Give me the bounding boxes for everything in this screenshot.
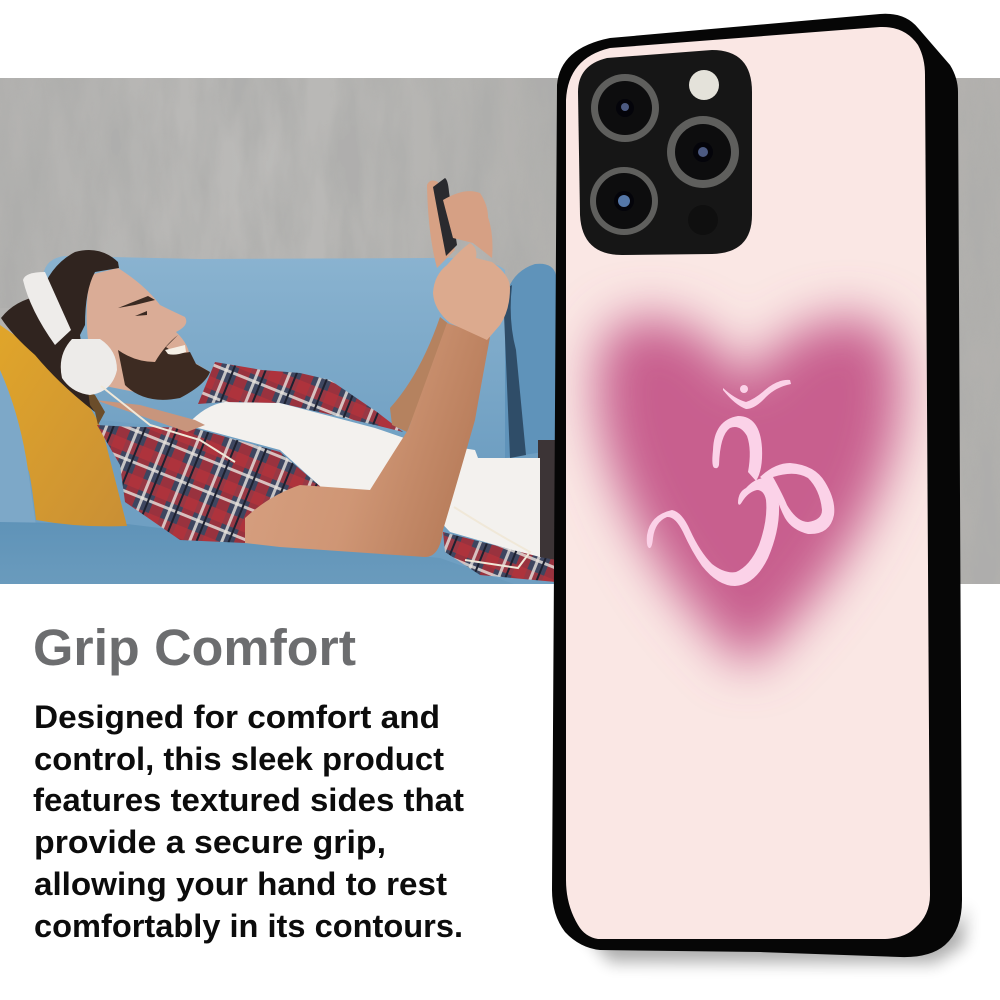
yellow pillow <box>0 325 127 526</box>
eyebrow and eye <box>118 296 155 316</box>
plaid collar <box>198 362 403 432</box>
phone <box>552 14 962 957</box>
headphone band <box>23 272 71 345</box>
body text <box>33 699 464 944</box>
om symbol <box>647 380 834 586</box>
sofa left arm <box>0 370 36 526</box>
om dot <box>740 385 748 393</box>
om right loop <box>760 463 834 534</box>
sofa seat <box>0 522 462 566</box>
plaid sleeve <box>97 425 322 543</box>
pillow shadow under neck <box>88 394 105 425</box>
case: black bumper <box>552 14 962 957</box>
flash <box>689 70 719 100</box>
sofa base <box>28 408 554 584</box>
camera island <box>578 50 752 255</box>
near arm <box>245 323 490 557</box>
sofa arm <box>505 264 556 458</box>
jeans <box>538 440 556 565</box>
background photo: man on sofa <box>0 78 562 584</box>
lower fist <box>433 243 510 340</box>
neck <box>95 400 205 432</box>
held phone <box>433 178 457 256</box>
om crescent <box>723 380 791 409</box>
plaid shirt hem <box>443 532 556 582</box>
lens top left <box>591 74 659 142</box>
body text: control, this sleek product <box>34 741 444 777</box>
hair <box>1 250 119 412</box>
phone case shadow <box>580 905 966 963</box>
body text: provide a secure grip, <box>34 824 386 860</box>
lens right <box>667 116 739 188</box>
upper hand fingers <box>443 191 492 258</box>
sofa back cushion <box>44 256 505 398</box>
heading: Grip Comfort <box>33 619 356 676</box>
body text: allowing your hand to rest <box>34 866 447 902</box>
body text: Designed for comfort and <box>34 699 440 735</box>
far arm <box>390 317 450 432</box>
head <box>87 268 210 394</box>
headphone cable <box>101 386 530 568</box>
wall <box>0 78 558 373</box>
body text: comfortably in its contours. <box>34 908 463 944</box>
sensor <box>688 205 718 235</box>
white t-shirt <box>187 402 540 558</box>
headphone ear cup <box>61 339 117 395</box>
blurred heart <box>597 317 901 668</box>
mouth <box>165 345 186 355</box>
om upper curve <box>712 416 762 481</box>
body text: features textured sides that <box>33 782 464 818</box>
upper hand thumb <box>427 181 455 268</box>
background photo: right wall strip <box>956 78 1000 584</box>
back panel: pink surface <box>560 20 940 950</box>
beard <box>118 335 210 400</box>
lens bottom left <box>590 167 658 235</box>
om lower curve <box>647 478 779 586</box>
